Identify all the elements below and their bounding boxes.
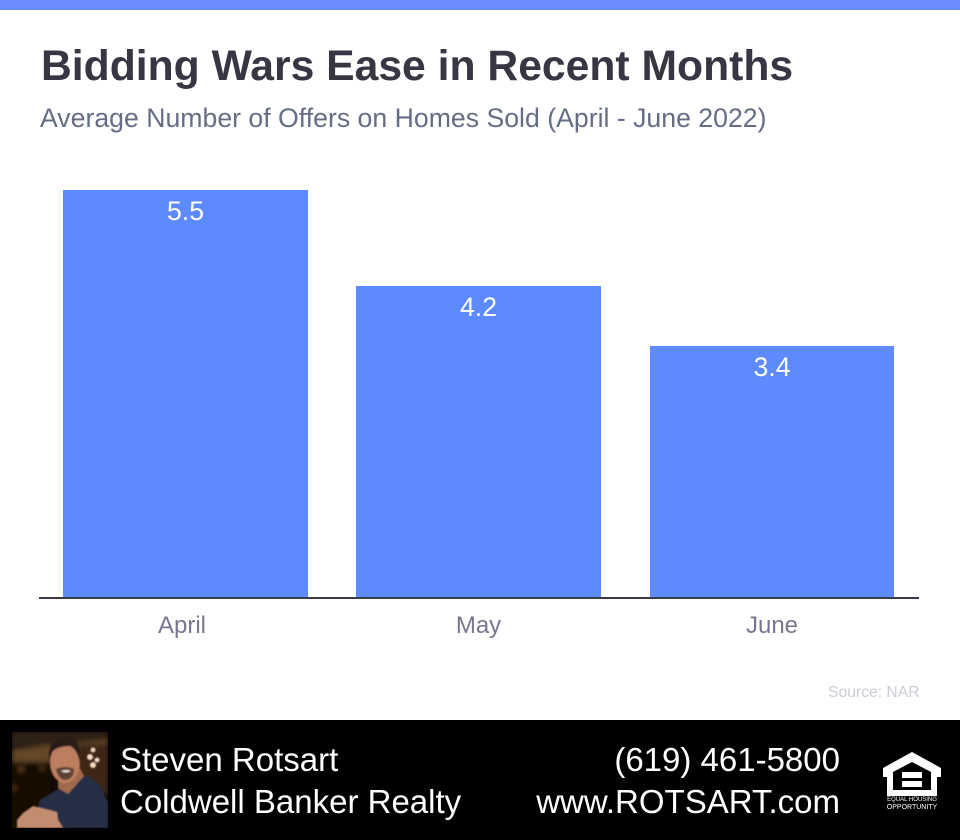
value: June: 3.4 [753, 352, 791, 382]
icon: equal housing opportunity [883, 752, 941, 811]
website: www.ROTSART.com [536, 783, 840, 820]
bar: May 4.2 [356, 286, 601, 598]
phone number: (619) 461-5800 [614, 741, 840, 778]
top accent band [0, 0, 960, 10]
subtitle: Average Number of Offers on Homes Sold (April - June 2022) [40, 103, 766, 133]
bar chart [39, 190, 919, 639]
agent photo [12, 732, 108, 828]
agent name: Steven Rotsart [120, 741, 338, 778]
icon caption: equal housing: EQUAL HOUSING [887, 797, 937, 803]
label: April: April [158, 612, 206, 639]
source note: Source: NAR [828, 684, 920, 701]
bar: April 5.5 [63, 190, 308, 598]
value: April: 5.5 [167, 196, 204, 226]
label: May: May [456, 612, 501, 639]
title: Bidding Wars Ease in Recent Months [41, 42, 793, 90]
bar: June 3.4 [650, 346, 894, 598]
value: May: 4.2 [460, 292, 497, 322]
icon caption: opportunity: OPPORTUNITY [887, 804, 937, 811]
x axis line [39, 597, 919, 599]
agent company: Coldwell Banker Realty [120, 783, 461, 820]
footer band [0, 720, 960, 840]
label: June: June [746, 612, 798, 639]
